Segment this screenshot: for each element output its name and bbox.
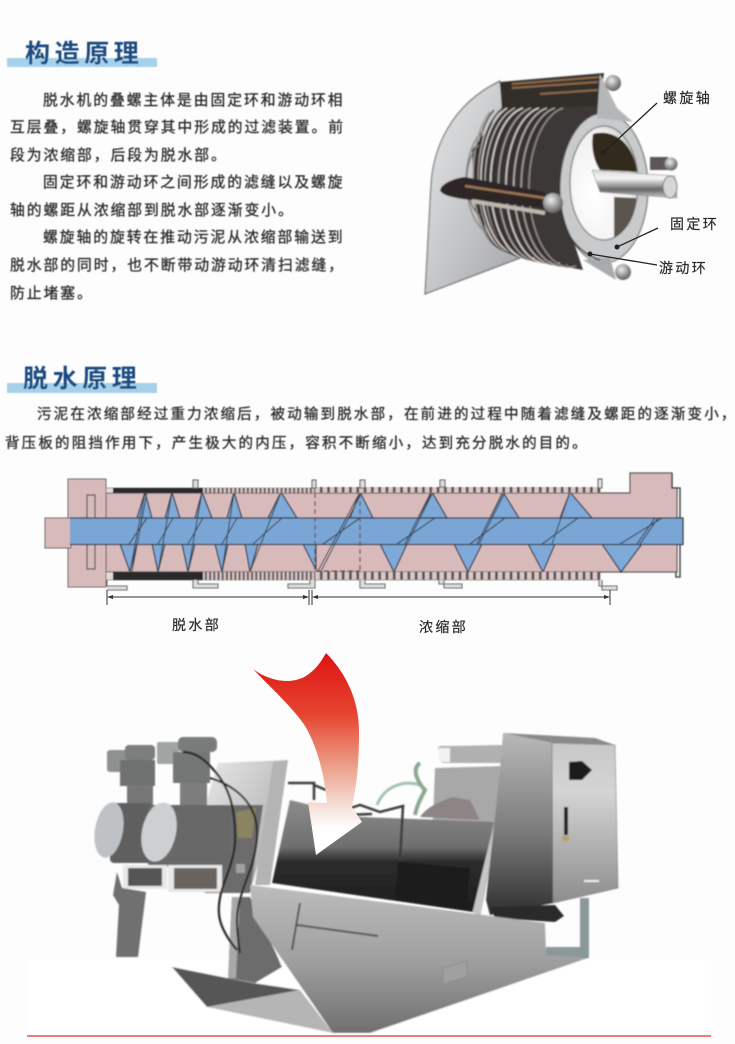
callout: 游动环: 游动环 bbox=[659, 260, 708, 276]
housing body bbox=[106, 473, 677, 572]
front ring bbox=[560, 113, 648, 263]
inspection plate bbox=[443, 961, 467, 984]
front hopper plate bbox=[250, 885, 588, 1033]
filter band top bbox=[106, 488, 600, 493]
dark lower chute bbox=[172, 967, 300, 1007]
callout: 固定环: 固定环 bbox=[670, 216, 719, 232]
text block: structure description: 轴的螺距从浓缩部到脱水部逐渐变小。 bbox=[10, 202, 295, 219]
control cabinet bbox=[486, 733, 553, 915]
text block: structure description: 段为浓缩部，后段为脱水部。 bbox=[10, 147, 228, 164]
back box bbox=[433, 766, 505, 825]
top tabs and bottom feet bbox=[107, 479, 617, 590]
red base line bbox=[27, 1035, 711, 1037]
callout: 游动环 bbox=[588, 252, 708, 276]
gearbox bbox=[205, 805, 263, 893]
callout: 固定环 bbox=[614, 216, 719, 250]
top rod bbox=[500, 73, 604, 112]
spiral shaft bbox=[592, 170, 677, 198]
T handle bbox=[292, 903, 378, 950]
heading: 构造原理: 构造原理 bbox=[25, 40, 143, 68]
text block: structure description: 互层叠，螺旋轴贯穿其中形成的过滤装置。前 bbox=[10, 119, 345, 136]
text block: dewatering description bbox=[5, 406, 735, 452]
callout: 螺旋轴 bbox=[600, 90, 712, 156]
left drive plate bbox=[205, 760, 288, 892]
label: 浓缩部: 浓缩部 bbox=[419, 619, 468, 635]
back wall plate bbox=[425, 81, 520, 294]
text block: structure description: 脱水部的同时，也不断带动游动环清扫滤缝， bbox=[10, 257, 345, 274]
motor two bbox=[136, 737, 230, 867]
text block: dewatering description: 污泥在浓缩部经过重力浓缩后，被动输到脱水部，在前进的过程中随着滤缝及螺距的逐渐变小， bbox=[37, 406, 735, 423]
red curved arrow bbox=[253, 653, 362, 855]
outlet walls bbox=[672, 473, 680, 577]
text block: dewatering description: 背压板的阻挡作用下，产生极大的内压，容积不断缩小，达到充分脱水的目的。 bbox=[5, 434, 589, 452]
cabinet knob bbox=[569, 761, 592, 780]
illustration: screw ring assembly bbox=[425, 73, 678, 294]
callout: 螺旋轴: 螺旋轴 bbox=[663, 90, 712, 106]
text block: structure description: 脱水机的叠螺主体是由固定环和游动环相 bbox=[43, 92, 344, 109]
cabinet handle bbox=[564, 807, 568, 835]
motor cables bbox=[183, 752, 237, 950]
aluminum mount frames bbox=[123, 865, 222, 892]
inner dark cavity bbox=[592, 133, 637, 172]
label: 脱水部: 脱水部 bbox=[172, 617, 221, 633]
text block: structure description: 固定环和游动环之间形成的滤缝以及螺旋 bbox=[43, 174, 344, 191]
text block: structure description: 防止堵塞。 bbox=[10, 284, 94, 302]
bolts bbox=[605, 75, 621, 91]
text block: structure description: 螺旋轴的旋转在推动污泥从浓缩部输送到 bbox=[43, 229, 344, 246]
under cabinet and bracket bbox=[490, 905, 564, 922]
central shaft bbox=[70, 518, 683, 544]
gate frame bbox=[288, 783, 403, 860]
heading: 脱水原理: 脱水原理 bbox=[23, 365, 141, 393]
filter band bottom bbox=[106, 572, 600, 580]
dimension line: thickening zone bbox=[312, 590, 610, 605]
bottom white backdrop bbox=[27, 960, 711, 1036]
spiral flights: blue triangles bbox=[120, 492, 642, 572]
flange bbox=[68, 479, 106, 587]
text block: structure description bbox=[10, 92, 345, 302]
hanging gray block bbox=[113, 872, 146, 957]
motor one bbox=[90, 745, 155, 863]
diagram: screw cross-section bbox=[45, 473, 683, 590]
lower strip bbox=[207, 990, 333, 1033]
flight edges crossing the shaft bbox=[129, 492, 662, 572]
side rods bbox=[440, 177, 545, 208]
zone dashed boundaries bbox=[315, 493, 360, 572]
coil body bbox=[472, 106, 600, 270]
dimension line: dewatering zone bbox=[107, 590, 309, 605]
hoses bbox=[377, 783, 420, 805]
shaft stub bbox=[45, 518, 71, 548]
photo: dewatering machine bbox=[27, 733, 711, 1036]
hopper back bbox=[272, 800, 495, 912]
